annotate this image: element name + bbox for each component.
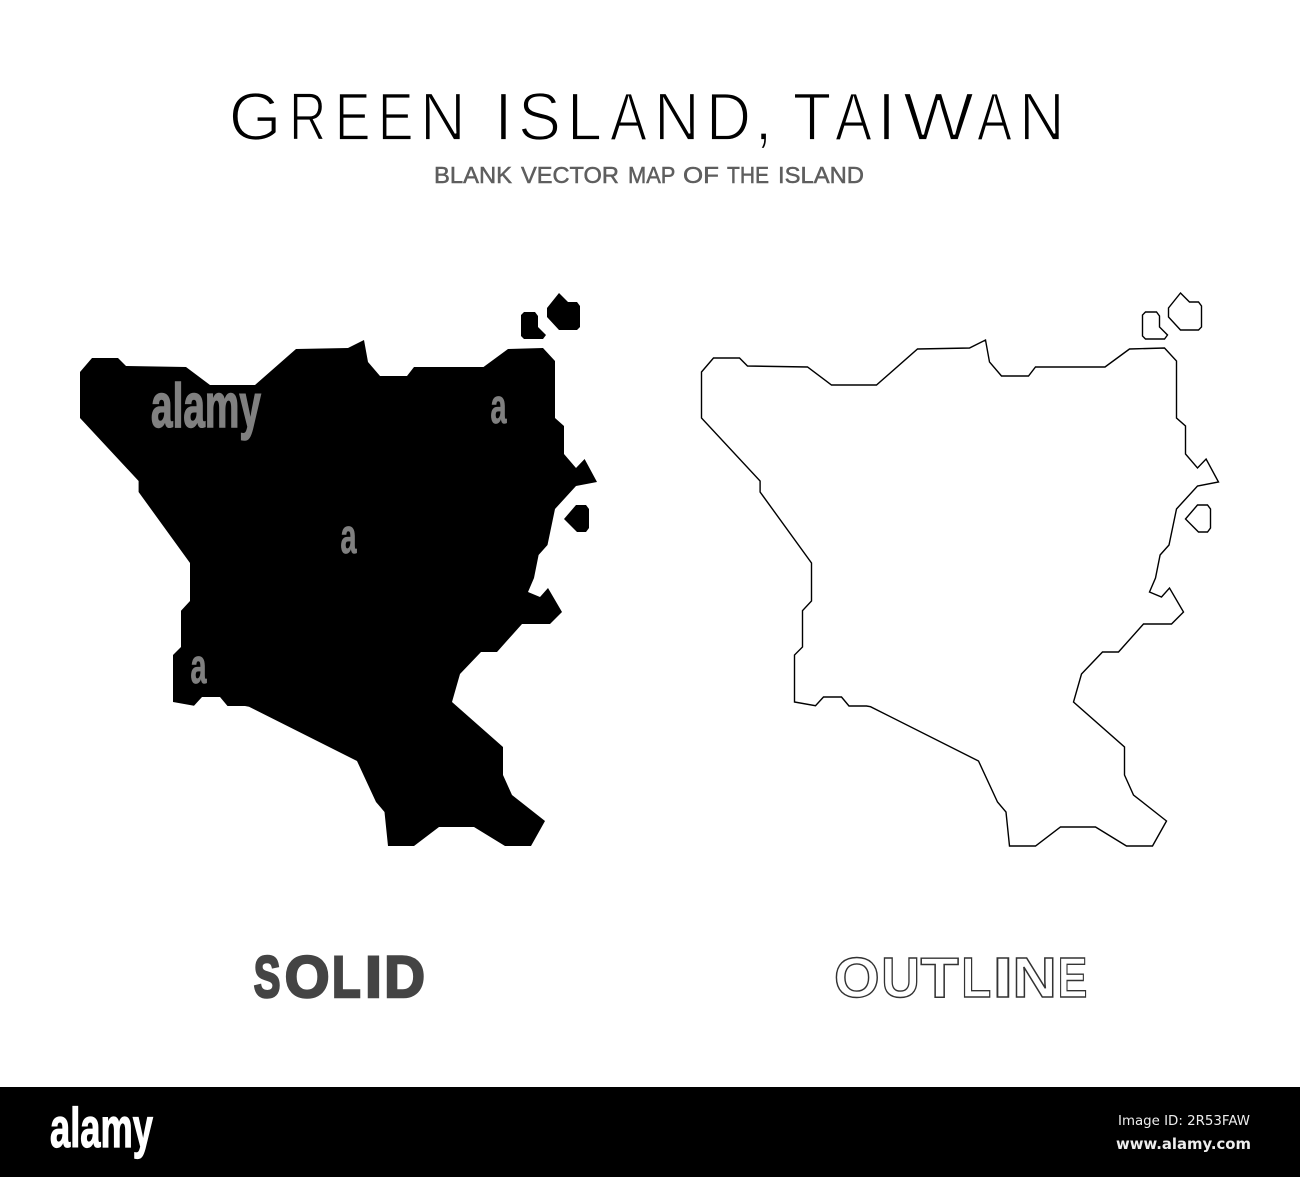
subtitle: THE	[727, 162, 769, 188]
title: I	[877, 79, 896, 155]
title: A	[610, 79, 648, 155]
title: W	[903, 79, 974, 155]
title: N	[1019, 79, 1065, 155]
website: www.alamy.com	[1116, 1135, 1251, 1153]
title: ,	[754, 79, 773, 155]
title: N	[654, 79, 700, 155]
label: solid: S	[254, 945, 280, 1010]
title: D	[706, 79, 751, 155]
title: E	[335, 79, 370, 155]
label: outline: L	[961, 946, 991, 1010]
label: solid: O	[285, 945, 329, 1010]
footer bar	[0, 1087, 1300, 1177]
label: solid: I	[365, 945, 382, 1010]
watermark: alamy on solid map	[151, 372, 507, 694]
title: S	[518, 79, 561, 155]
footer logo: alamy	[50, 1096, 153, 1159]
label: solid: L	[332, 945, 361, 1010]
outline map	[702, 293, 1218, 846]
label: outline: I	[992, 946, 1013, 1010]
title: A	[835, 79, 873, 155]
subtitle: MAP	[628, 162, 675, 188]
label: outline: E	[1058, 946, 1087, 1010]
title: N	[420, 79, 466, 155]
watermark: alamy on solid map: alamy	[151, 372, 261, 441]
subtitle: VECTOR	[521, 162, 619, 188]
title: A	[977, 79, 1012, 155]
label: outline: T	[920, 946, 959, 1010]
subtitle: BLANK	[434, 162, 513, 188]
title: I	[494, 79, 513, 155]
label: outline: U	[881, 946, 920, 1010]
subtitle: ISLAND	[778, 162, 864, 188]
watermark: alamy on solid map: a	[190, 640, 207, 694]
solid map	[80, 293, 597, 846]
title: G	[229, 79, 282, 155]
watermark: alamy on solid map: a	[340, 510, 357, 564]
title: R	[289, 79, 326, 155]
watermark: alamy on solid map: a	[490, 380, 507, 434]
title: T	[793, 79, 831, 155]
image id: Image ID: 2R53FAW	[1118, 1113, 1250, 1129]
subtitle: OF	[683, 162, 719, 188]
label: outline: N	[1012, 946, 1057, 1010]
title: L	[567, 79, 602, 155]
label: outline: O	[834, 946, 880, 1010]
label: solid: D	[384, 945, 425, 1010]
title: E	[378, 79, 414, 155]
